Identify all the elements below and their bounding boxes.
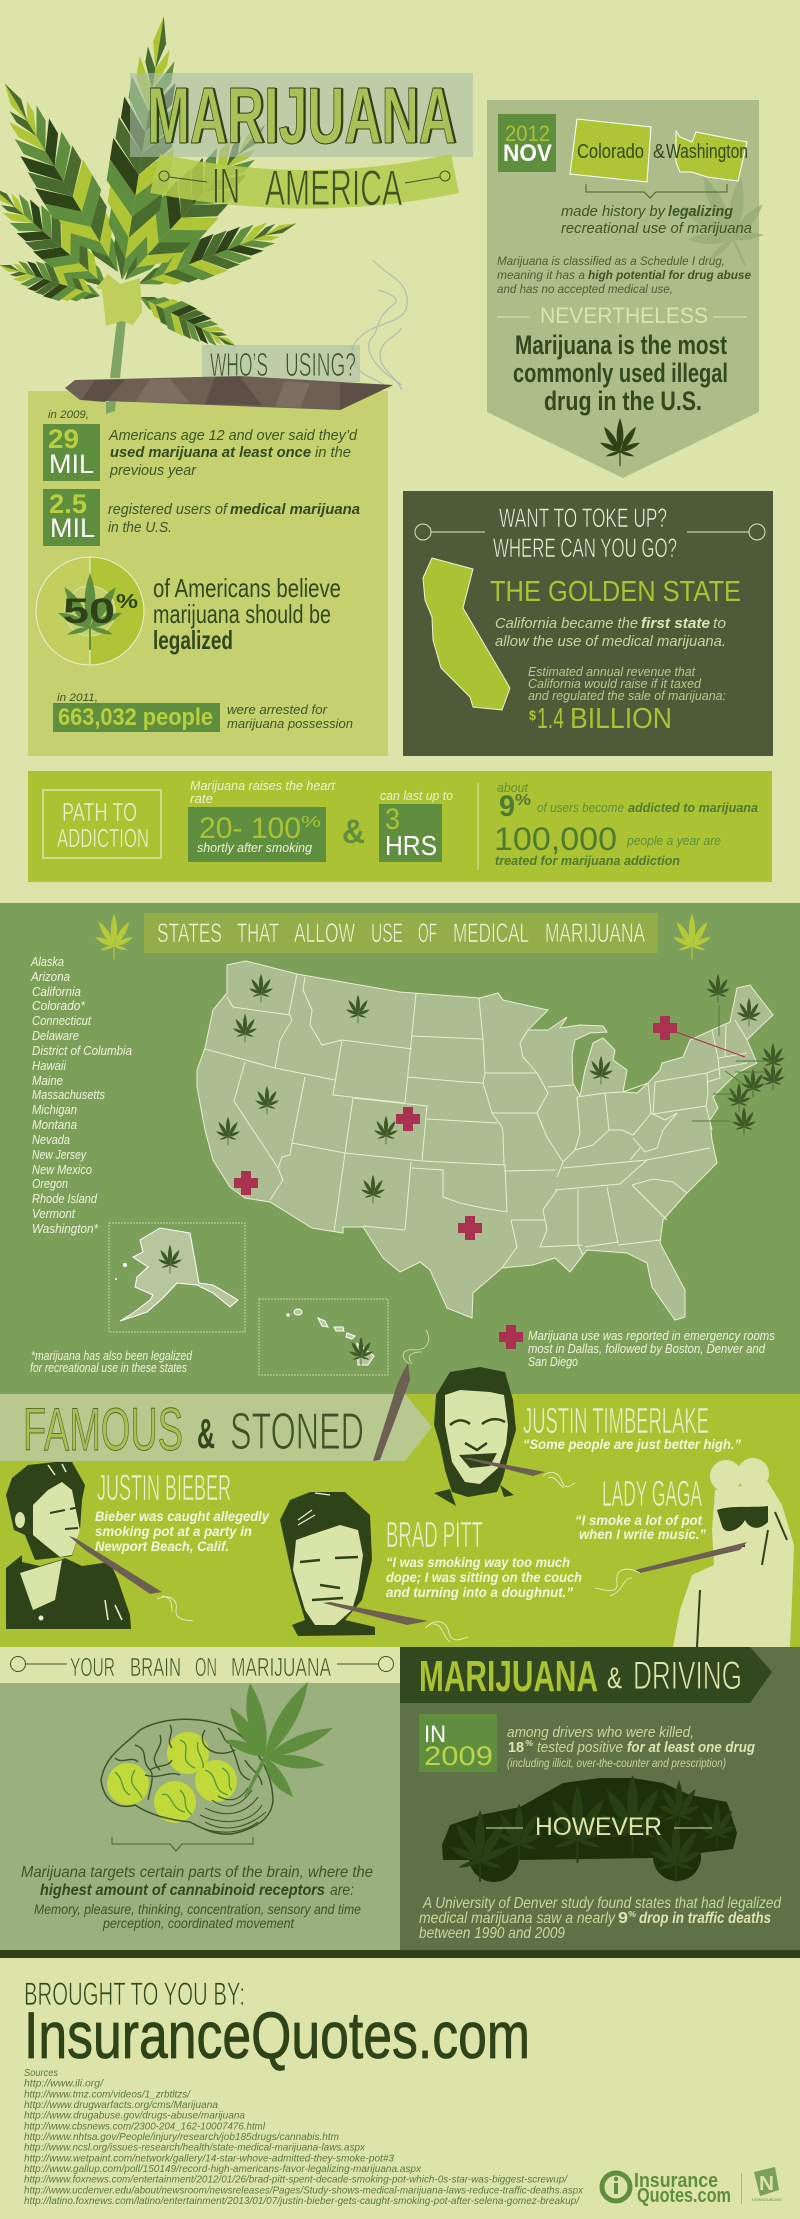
list: states: Massachusetts (32, 1087, 105, 1102)
text: sources: http://www.gallup.com/poll/150149/record-high-americans-favor-legalizing-marijuana.aspx (24, 2163, 422, 2175)
list: states: Rhode Island (32, 1191, 98, 1206)
logo: InsuranceQuotes (602, 2170, 731, 2207)
list: states: Arizona (30, 969, 70, 984)
text: University of Denver study: drop in traffic deaths (639, 1910, 771, 1927)
panel: your brain on marijuana (0, 1647, 400, 1950)
stat: 1.4 billion: BILLION (570, 703, 672, 735)
stat: 29 million (43, 409, 358, 481)
stat: heart rate: rate (190, 791, 213, 806)
logo: InsuranceQuotes: Quotes.com (637, 2185, 731, 2207)
stat: arrests (53, 692, 353, 732)
illustration: joint (65, 376, 393, 410)
list: states: New Mexico (32, 1162, 92, 1177)
date block: 2012 Nov (498, 114, 556, 172)
list: states: Oregon (32, 1176, 68, 1191)
text: Justin Bieber: Bieber was caught allegedly (95, 1508, 270, 1524)
list: states: Connecticut (32, 1013, 92, 1028)
panel: path to addiction (28, 771, 772, 882)
footer: brought to you by: InsuranceQuotes.com (24, 1998, 530, 2072)
text: sources: http://www.wetpaint.com/network/gallery/14-star-whove-admitted-they-smoke-pot#3 (24, 2152, 394, 2164)
text: 18 percent tested positive: for at least one drug (627, 1739, 755, 1756)
icon: faded leaf (665, 157, 783, 283)
statement: most commonly used: commonly used illegal (513, 358, 728, 388)
heading: famous and stoned: FAMOUS (23, 1396, 183, 1463)
stat: 9 percent addicted: % (515, 792, 531, 809)
text: sources: http://www.nhtsa.gov/People/injury/research/job185drugs/cannabis.htm (24, 2131, 339, 2143)
chart: 50 percent donut (36, 557, 144, 665)
list: states: Washington* (32, 1221, 99, 1236)
list: states: New Jersey (32, 1147, 87, 1162)
statement: most commonly used: drug in the U.S. (544, 386, 702, 416)
title: Marijuana: MARIJUANA (149, 71, 458, 160)
stat: 29 million: Americans age 12 and over said they’d (108, 427, 358, 444)
label: path to addiction: ADDICTION (57, 823, 149, 853)
logo: InsuranceQuotes: Insurance (634, 2170, 718, 2192)
stat: 100,000 treated: people a year are (626, 833, 721, 848)
list: states: District of Columbia (32, 1043, 132, 1058)
legend: emergency rooms: most in Dallas, followed by Boston, Denver and (528, 1341, 766, 1356)
stat: three hours (379, 788, 453, 862)
heading: your brain: ON (195, 1652, 217, 1682)
text: 18 percent tested positive: 18 (508, 1739, 524, 1756)
banner: in America (150, 154, 459, 216)
statement: most commonly used: Marijuana is the most (515, 330, 727, 360)
states: Colorado and Washington: Colorado (577, 141, 644, 163)
text: University of Denver study (419, 1895, 782, 1942)
panel: medical marijuana map (0, 903, 800, 1394)
text: Brad Pitt: and turning into a doughnut.” (386, 1584, 573, 1600)
heading: who's using: WHO’S (210, 346, 268, 383)
text: schedule I: high potential for drug abuse (588, 268, 751, 282)
text: schedule I: Marijuana is classified as a Schedule I drug, (497, 254, 725, 268)
stat: 2.5 million (43, 489, 360, 546)
stat: 2.5 million: 2.5 (49, 489, 87, 519)
heading: your brain (0, 1647, 400, 1683)
stat: 29 million: previous year (109, 462, 197, 479)
text: University of Denver study: % (628, 1910, 636, 1919)
text: Justin Timberlake: “Some people are just better high.” (523, 1436, 741, 1452)
illustration: leaf over brain (225, 1682, 333, 1797)
text: Justin Bieber: JUSTIN BIEBER (97, 1467, 231, 1508)
text: schedule I: and has no accepted medical use, (497, 282, 673, 296)
heading: states that allow: USE (371, 918, 403, 948)
heading: famous and stoned: & (197, 1410, 215, 1457)
logo: NowSourcing: N (759, 2173, 774, 2195)
heading: your brain: BRAIN (130, 1652, 181, 1682)
heading: who's using: USING? (285, 346, 356, 383)
panel: who's using (28, 391, 388, 756)
portrait: Justin Timberlake (434, 1367, 575, 1506)
stat: three hours: 3 (385, 803, 400, 836)
text: sources: http://latino.foxnews.com/latino/entertainment/2013/01/07/justin-bieber-gets-caught-smoking-pot-after-selena-gomez-breakup/ (24, 2195, 580, 2207)
footer: brought to you by (24, 1976, 530, 2072)
icons: state leaves (158, 974, 785, 1365)
icons: emergency room crosses (234, 1016, 745, 1240)
illustration: car with leaves (442, 1775, 737, 1882)
list: states: Maine (32, 1073, 63, 1088)
text: brain explanation: are: (330, 1882, 354, 1899)
text: sources: http://www.foxnews.com/entertainment/2012/01/26/brad-pitt-spent-decade-smoking-pot-which-0s-star-was-biggest-screwup/ (24, 2174, 568, 2186)
stat: 29 million: used marijuana at least once (110, 444, 311, 461)
stat: 9 percent addicted: addicted to marijuana (628, 800, 758, 815)
text: Lady Gaga: when I write music.” (579, 1526, 706, 1542)
text: Brad Pitt: dope; I was sitting on the couch (386, 1569, 582, 1585)
date block: 2012 Nov: 2012 (505, 121, 550, 146)
text: Brad Pitt: “I was smoking way too much (386, 1554, 570, 1570)
chart: 50 percent donut: 50 (63, 592, 115, 631)
list: states: Michigan (32, 1102, 77, 1117)
text: sources: http://www.ucdenver.edu/about/newsroom/newsreleases/Pages/Study-shows-medical-marijuana-laws-reduce-traffic-deaths.aspx (24, 2184, 584, 2196)
text: Lady Gaga (575, 1473, 706, 1542)
heading: want to toke up: WANT TO TOKE UP? (499, 503, 667, 533)
date block: in 2009 (419, 1714, 497, 1772)
icon: dark leaf (600, 418, 640, 466)
list: states: Montana (32, 1117, 77, 1132)
heading: marijuana and driving (400, 1647, 772, 1703)
stat: 1.4 billion: 1.4 (537, 703, 564, 735)
heading: want to toke up (415, 503, 765, 563)
heading: states that allow: THAT (237, 918, 279, 948)
icon: smoke above joint (352, 260, 407, 390)
stat: 9 percent addicted (497, 781, 758, 823)
note: recreational use: for recreational use in these states (30, 1361, 187, 1375)
heading: states that allow: MEDICAL (453, 918, 529, 948)
note: recreational use: *marijuana has also been legalized (31, 1349, 193, 1363)
text: made history: recreational use of marijuana (561, 221, 752, 237)
text: 18 percent tested positive: (including illicit, over-the-counter and prescription) (507, 1758, 726, 1770)
heading: the golden state: THE GOLDEN STATE (490, 576, 741, 608)
icon: lime leaf left (95, 914, 133, 959)
text: 18 percent tested positive: among drivers who were killed, (507, 1724, 694, 1741)
portrait: Justin Bieber (6, 1462, 193, 1629)
text: sources: http://www.ncsl.org/issues-research/health/state-medical-marijuana-laws.aspx (24, 2142, 366, 2154)
text: estimated revenue: and regulated the sale of marijuana: (528, 689, 726, 703)
label: path to addiction: PATH TO (62, 797, 137, 827)
text: University of Denver study: 9 (618, 1910, 628, 1927)
stat: 2.5 million: medical marijuana (230, 501, 360, 518)
logo: NowSourcing: NOWSOURCING (752, 2198, 782, 2202)
heading: states that allow (144, 913, 658, 953)
stat: 2.5 million: MIL (50, 513, 95, 543)
text: believe legalized: legalized (153, 625, 233, 655)
stat: 2.5 million: registered users of (108, 501, 229, 518)
stat: 29 million: in the (315, 444, 351, 461)
stat: heart rate (188, 778, 336, 862)
text: Justin Bieber: Newport Beach, Calif. (95, 1538, 229, 1554)
list: states: Alaska (30, 954, 64, 969)
text: believe legalized: of Americans believe (153, 573, 341, 603)
portrait: Lady Gaga (595, 1458, 794, 1647)
banner: in America: IN (212, 158, 240, 214)
panel: marijuana and driving (400, 1647, 800, 1950)
text: made history: legalizing (668, 204, 733, 220)
heading: states that allow: OF (418, 918, 437, 948)
footer: brought to you by: BROUGHT TO YOU BY: (24, 1976, 245, 2012)
stat: three hours: HRS (385, 830, 437, 861)
symbol: ampersand: & (342, 813, 365, 851)
list: states: Vermont (32, 1206, 76, 1221)
text: schedule I (497, 254, 751, 296)
states: Colorado and Washington (570, 119, 748, 198)
heading: marijuana and driving: MARIJUANA (419, 1652, 598, 1701)
stat: 29 million: 29 (48, 424, 79, 454)
map: California (423, 558, 510, 710)
map: Alaska inset (109, 1223, 245, 1332)
stat: 9 percent addicted: of users become (537, 800, 624, 815)
text: brain explanation: Marijuana targets certain parts of the brain, where the (21, 1864, 373, 1881)
heading: your brain: MARIJUANA (231, 1652, 331, 1682)
text: California first state: first state (641, 615, 710, 632)
divider strip (0, 1950, 800, 1958)
stat: 100,000 treated: 100,000 (494, 821, 617, 857)
text: brain explanation: perception, coordinated movement (102, 1916, 295, 1931)
heading: states that allow: ALLOW (294, 918, 355, 948)
stat: heart rate: shortly after smoking (197, 840, 313, 855)
text: 18 percent tested positive: tested positive (537, 1739, 623, 1756)
stat: 100,000 treated (494, 821, 721, 868)
stat: 9 percent addicted: 9 (499, 790, 515, 823)
list: states: California (32, 984, 81, 999)
text: believe legalized: marijuana should be (153, 599, 331, 629)
stat: heart rate: 20- 100 (199, 812, 301, 845)
text: estimated revenue: Estimated annual revenue that (528, 665, 696, 679)
text: Brad Pitt (386, 1514, 582, 1600)
stat: arrests: 663,032 people (58, 704, 213, 731)
illustration: header joint (373, 1330, 429, 1461)
chart: 50 percent donut: % (116, 591, 138, 613)
heading: famous and stoned (0, 1394, 432, 1463)
stat: 2.5 million: in the U.S. (108, 519, 172, 536)
states: Colorado and Washington: Washington (666, 141, 748, 163)
date block: in 2009: 2009 (424, 1741, 493, 1771)
stat: arrests: in 2011, (57, 692, 98, 704)
text: brain explanation (21, 1864, 373, 1931)
text: estimated revenue: California would raise if it taxed (528, 677, 702, 691)
stat: 29 million: in 2009, (48, 409, 89, 421)
text: made history: made history by (561, 204, 666, 220)
stat: heart rate: % (301, 814, 321, 831)
list: states: Colorado* (32, 998, 86, 1013)
text: brain explanation: highest amount of cannabinoid receptors (40, 1882, 325, 1899)
heading: who's using (202, 345, 360, 383)
date block: 2012 Nov: NOV (503, 140, 552, 167)
text: Brad Pitt: BRAD PITT (386, 1514, 483, 1555)
text: 18 percent tested positive: % (525, 1739, 533, 1748)
icon: lime leaf right (673, 914, 711, 959)
list: states: Nevada (32, 1132, 70, 1147)
map: contiguous United States (197, 961, 773, 1320)
heading: want to toke up: WHERE CAN YOU GO? (493, 533, 677, 563)
text: Justin Timberlake (523, 1400, 741, 1452)
list: states (30, 954, 132, 1236)
text: Justin Bieber: smoking pot at a party in (95, 1523, 252, 1539)
legend: emergency rooms: San Diego (528, 1354, 578, 1369)
stat: three hours: can last up to (380, 788, 453, 803)
states: Colorado and Washington: & (653, 141, 666, 163)
text: made history (561, 204, 752, 237)
text: University of Denver study: between 1990 and 2009 (419, 1925, 565, 1942)
map: Hawaii inset (259, 1299, 388, 1375)
text: California first state: allow the use of medical marijuana. (495, 633, 726, 650)
heading: states that allow: STATES (157, 918, 222, 948)
stat: heart rate: Marijuana raises the heart (190, 778, 336, 793)
heading: however: HOWEVER (535, 1813, 662, 1841)
text: brain explanation: Memory, pleasure, thinking, concentration, sensory and time (34, 1902, 361, 1917)
panel: the golden state (403, 491, 773, 756)
panel: famous and stoned (0, 1330, 800, 1647)
heading: marijuana and driving: DRIVING (633, 1654, 742, 1698)
stat: 29 million: MIL (49, 449, 94, 479)
title: Marijuana: MARIJUANA (147, 71, 456, 160)
stat: arrests: marijuana possession (227, 717, 353, 731)
heading: your brain: YOUR (70, 1652, 115, 1682)
heading: states that allow: MARIJUANA (545, 918, 645, 948)
note: recreational use (30, 1349, 193, 1375)
stat: 9 percent addicted: about (497, 781, 529, 795)
heading: marijuana and driving: & (607, 1662, 622, 1695)
text: California first state: California became the (495, 615, 638, 632)
heading: famous and stoned: STONED (230, 1403, 364, 1461)
banner: in America: AMERICA (265, 160, 402, 216)
title: Marijuana (130, 71, 473, 160)
stat: arrests: were arrested for (227, 703, 328, 717)
stat: 100,000 treated: treated for marijuana addiction (495, 853, 680, 868)
statement: most commonly used (513, 330, 728, 416)
text: sources: http://www.tmz.com/videos/1_zrbtltzs/ (24, 2088, 191, 2100)
text: University of Denver study: medical marijuana saw a nearly (419, 1910, 616, 1927)
list: states: Hawaii (32, 1058, 67, 1073)
stat: 1.4 billion (529, 703, 672, 735)
text: believe legalized (153, 573, 341, 655)
text: sources: Sources (24, 2067, 59, 2079)
legend: emergency rooms (499, 1325, 775, 1369)
date block: in 2009: IN (424, 1721, 446, 1748)
text: sources: http://www.ili.org/ (24, 2078, 104, 2090)
list: states: Delaware (32, 1028, 79, 1043)
text: schedule I: meaning it has a (497, 268, 585, 282)
stat: 1.4 billion: $ (529, 707, 536, 723)
heading: nevertheless: NEVERTHELESS (540, 303, 708, 328)
illustration: large cannabis leaf (0, 11, 304, 378)
text: California first state (495, 615, 726, 650)
text: Lady Gaga: “I smoke a lot of pot (575, 1512, 703, 1528)
text: California first state: to (713, 615, 726, 632)
illustration: brain (101, 1719, 273, 1834)
text: 18 percent tested positive (507, 1724, 755, 1770)
text: sources: http://www.drugwarfacts.org/cms/Marijuana (24, 2099, 218, 2111)
text: estimated revenue (528, 665, 726, 703)
portrait: Brad Pitt (280, 1492, 468, 1642)
panel: 2012 legalization pennant (487, 100, 783, 478)
text: sources: http://www.drugabuse.gov/drugs-abuse/marijuana (24, 2110, 245, 2122)
text: sources: http://www.cbsnews.com/2300-204_162-10007476.html (24, 2120, 266, 2132)
label: path to addiction (43, 790, 161, 858)
logo: NowSourcing (741, 2167, 782, 2204)
text: Justin Bieber (95, 1467, 270, 1554)
text: sources (24, 2067, 584, 2207)
